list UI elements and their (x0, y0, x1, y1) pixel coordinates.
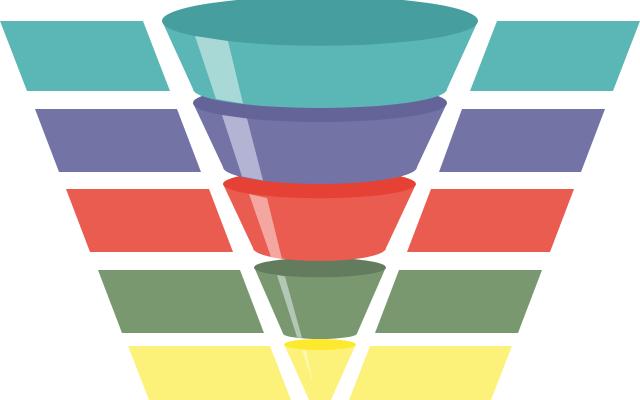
right banner: red (407, 189, 574, 252)
funnel tier: yellow (284, 339, 356, 400)
left banner: red (66, 189, 233, 252)
funnel tier: red (223, 170, 416, 261)
left banner: purple (35, 109, 201, 172)
right banner: green (375, 270, 542, 333)
right banner: purple (439, 109, 605, 172)
right banner: yellow (349, 346, 512, 400)
funnel tier: teal (162, 0, 478, 108)
left banner: yellow (128, 346, 291, 400)
left banner: green (98, 270, 264, 333)
funnel tier: purple (193, 84, 447, 184)
funnel tier: green (254, 258, 386, 339)
left banner: teal (0, 21, 170, 91)
right banner: teal (470, 21, 640, 91)
